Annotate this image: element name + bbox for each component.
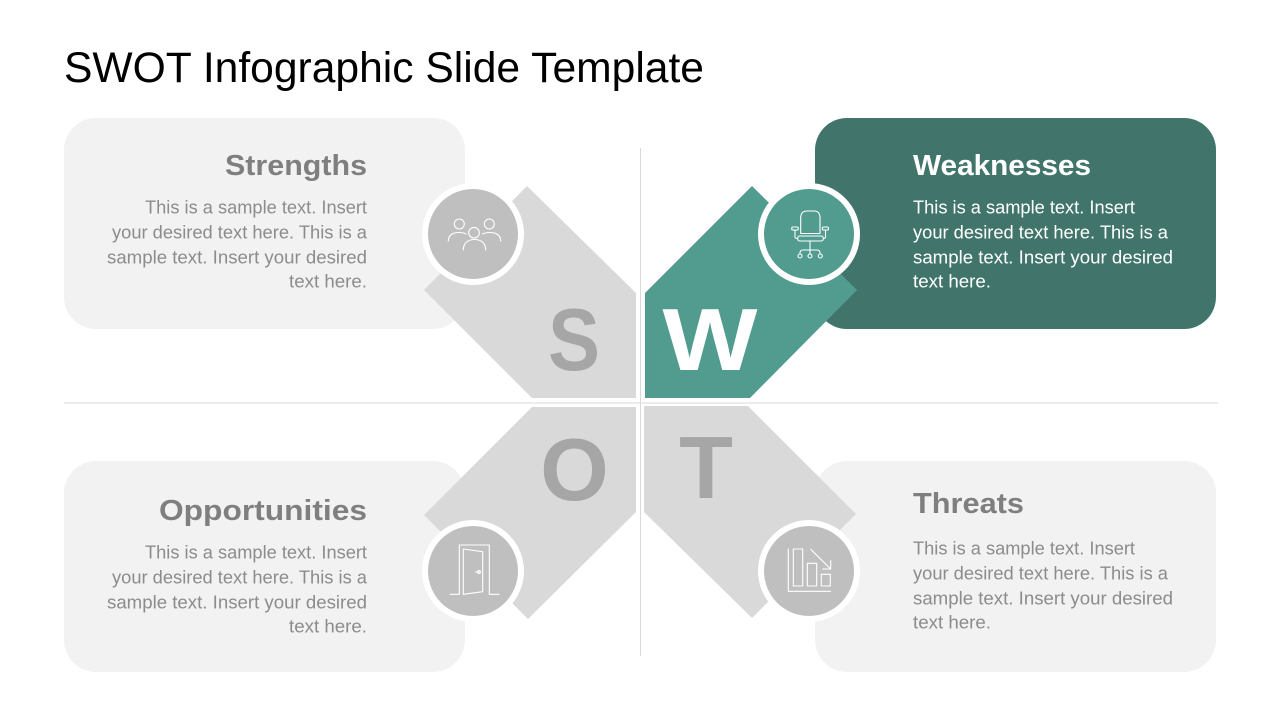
opportunities card [64, 461, 465, 672]
icon: people [422, 183, 524, 285]
strengths text: text here. [289, 270, 367, 292]
strengths text [107, 196, 368, 292]
letter T: T [679, 418, 733, 517]
letter W: W [662, 290, 758, 389]
threats text: text here. [913, 612, 991, 632]
opportunities text: sample text. Insert your desired [107, 592, 367, 612]
weaknesses card [815, 118, 1216, 329]
icon: declining bar chart [758, 520, 860, 622]
opportunities text: text here. [289, 616, 367, 636]
strengths text: sample text. Insert your desired [107, 246, 367, 268]
strengths card [64, 118, 465, 329]
panel: threats [644, 406, 1216, 672]
strengths heading: Strengths [225, 150, 367, 182]
panel: strengths [64, 118, 636, 398]
threats card [815, 461, 1216, 672]
weaknesses text: This is a sample text. Insert [913, 196, 1136, 218]
strengths text: your desired text here. This is a [112, 222, 368, 242]
title: SWOT Infographic Slide Template [64, 44, 704, 92]
threats heading: Threats [913, 488, 1024, 520]
icon: office chair [758, 183, 860, 285]
weaknesses text: sample text. Insert your desired [913, 246, 1173, 268]
threats text: your desired text here. This is a [913, 562, 1169, 584]
threats text [913, 538, 1173, 632]
weaknesses arrow shape [645, 186, 857, 398]
icon: open door [422, 520, 524, 622]
weaknesses text: text here. [913, 270, 991, 292]
opportunities text: This is a sample text. Insert [145, 542, 368, 562]
opportunities text: your desired text here. This is a [112, 566, 368, 588]
weaknesses text: your desired text here. This is a [913, 222, 1169, 242]
threats arrow shape [644, 406, 856, 618]
opportunities text [107, 542, 368, 636]
weaknesses heading: Weaknesses [913, 150, 1091, 182]
letter S: S [548, 290, 600, 389]
strengths text: This is a sample text. Insert [145, 196, 368, 218]
threats text: This is a sample text. Insert [913, 538, 1136, 558]
opportunities heading: Opportunities [159, 495, 367, 527]
letter O: O [540, 420, 609, 519]
strengths arrow shape [424, 186, 636, 398]
threats text: sample text. Insert your desired [913, 588, 1173, 608]
panel: weaknesses [645, 118, 1216, 398]
weaknesses text [913, 196, 1173, 292]
opportunities arrow shape [424, 407, 636, 619]
panel: opportunities [64, 407, 636, 672]
